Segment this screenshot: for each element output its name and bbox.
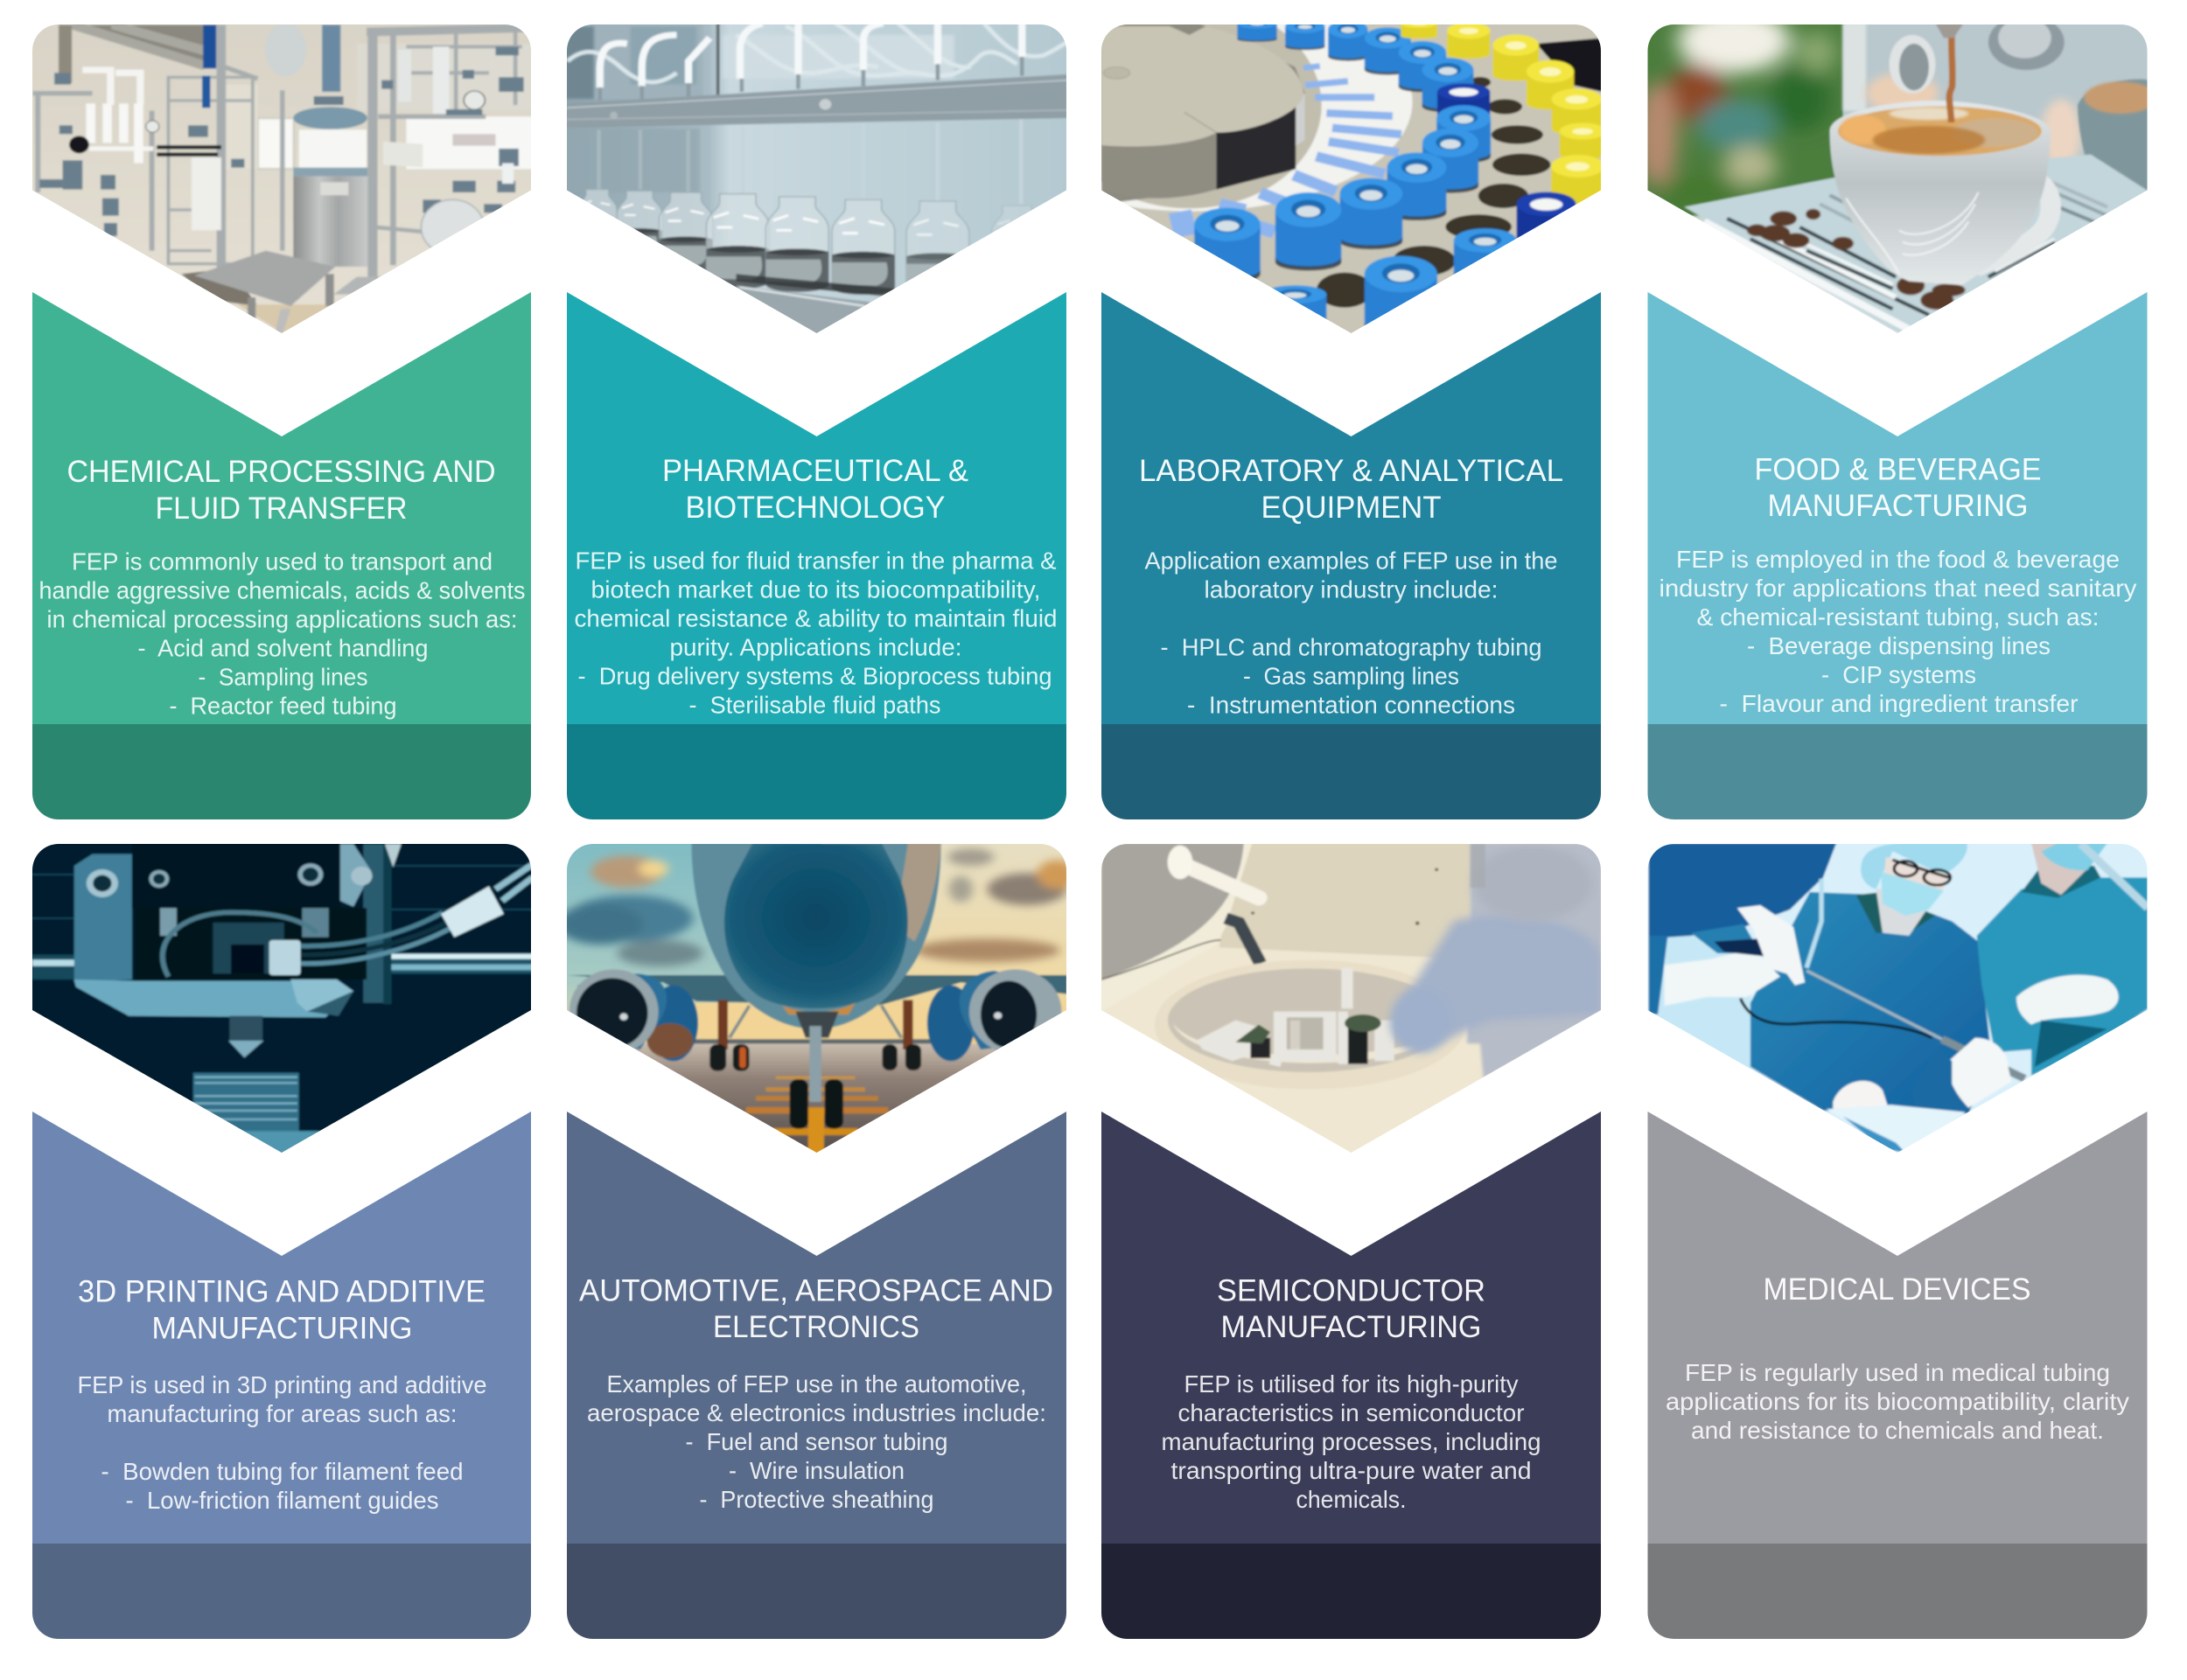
body text: - Sampling lines (198, 663, 367, 691)
heading (66, 455, 495, 526)
colour panel (1648, 1112, 2147, 1544)
body text: - Gas sampling lines (1243, 663, 1459, 689)
colour panel (32, 292, 531, 724)
body text: FEP is employed in the food & beverage (1676, 546, 2120, 573)
body text: characteristics in semiconductor (1177, 1399, 1524, 1426)
heading: MEDICAL DEVICES (1764, 1272, 2031, 1307)
body text: FEP is used for fluid transfer in the pharma & (576, 547, 1057, 574)
body text (1162, 1370, 1541, 1513)
body text: - Reactor feed tubing (170, 693, 397, 719)
body text: FEP is regularly used in medical tubing (1685, 1359, 2110, 1386)
colour panel (1648, 292, 2147, 724)
body text: FEP is utilised for its high-purity (1184, 1370, 1519, 1398)
heading (579, 1273, 1053, 1344)
body text: & chemical-resistant tubing, such as: (1697, 603, 2100, 631)
heading: SEMICONDUCTOR (1217, 1273, 1485, 1308)
footer band (1101, 724, 1601, 819)
heading: 3D PRINTING AND ADDITIVE (78, 1275, 486, 1308)
footer band (1101, 1544, 1601, 1639)
colour panel (567, 1112, 1066, 1544)
body text: manufacturing for areas such as: (107, 1400, 457, 1427)
colour panel (567, 292, 1066, 724)
photo: autosampler vial tray (1101, 24, 1601, 333)
body text: laboratory industry include: (1204, 575, 1498, 603)
photo: espresso pouring into cup (1648, 24, 2147, 333)
body text: manufacturing processes, including (1162, 1428, 1541, 1455)
body text: - Flavour and ingredient transfer (1720, 690, 2079, 717)
body text: Examples of FEP use in the automotive, (607, 1370, 1027, 1398)
body text: - CIP systems (1821, 661, 1976, 688)
body text (1144, 547, 1557, 719)
body text: industry for applications that need sanitary (1659, 575, 2137, 602)
body text: chemicals. (1296, 1486, 1407, 1513)
body text: - Low-friction filament guides (126, 1487, 438, 1514)
body text: in chemical processing applications such as: (47, 605, 518, 633)
panel: food and beverage manufacturing (1638, 9, 2161, 819)
heading: AUTOMOTIVE, AEROSPACE AND (579, 1273, 1053, 1308)
photo: vial filling line (564, 17, 1080, 341)
body text: - Fuel and sensor tubing (686, 1428, 948, 1455)
photo: chemical processing plant (26, 17, 542, 341)
photo: wafer processing chamber (1094, 840, 1610, 1163)
photo: 3D printer extruder (26, 840, 542, 1163)
heading (1755, 453, 2042, 523)
body text: purity. Applications include: (670, 633, 962, 661)
body text: and resistance to chemicals and heat. (1691, 1417, 2104, 1444)
footer band (567, 724, 1066, 819)
body text: Application examples of FEP use in the (1144, 547, 1557, 574)
panel: laboratory and analytical equipment (1101, 24, 1601, 819)
body text: biotech market due to its biocompatibility, (591, 575, 1041, 603)
panel: automotive, aerospace and electronics (557, 840, 1080, 1639)
body text (1659, 546, 2137, 717)
heading: CHEMICAL PROCESSING AND (66, 455, 495, 489)
colour panel (1101, 292, 1601, 724)
body text: aerospace & electronics industries include: (587, 1399, 1046, 1426)
body text (574, 547, 1057, 719)
body text (77, 1371, 486, 1514)
panel: 3D printing and additive manufacturing (26, 840, 542, 1639)
footer band (567, 1544, 1066, 1639)
footer band (32, 1544, 531, 1639)
body text: FEP is used in 3D printing and additive (77, 1371, 486, 1398)
colour panel (32, 1112, 531, 1544)
photo: aircraft nose at sunset (557, 840, 1080, 1161)
heading: BIOTECHNOLOGY (686, 491, 945, 525)
body text: - HPLC and chromatography tubing (1160, 633, 1541, 661)
body text: - Wire insulation (729, 1457, 905, 1484)
heading: MANUFACTURING (1767, 489, 2028, 523)
heading: LABORATORY & ANALYTICAL (1139, 454, 1563, 488)
heading: MANUFACTURING (152, 1312, 413, 1345)
body text: - Sterilisable fluid paths (689, 691, 941, 719)
heading: MANUFACTURING (1221, 1310, 1482, 1344)
heading (78, 1275, 486, 1345)
footer band (32, 724, 531, 819)
body text: - Instrumentation connections (1187, 691, 1515, 719)
footer band (1648, 1544, 2147, 1639)
body text (1666, 1359, 2129, 1444)
heading: ELECTRONICS (713, 1310, 919, 1344)
heading: FOOD & BEVERAGE (1755, 453, 2042, 486)
panel: chemical processing and fluid transfer (26, 17, 542, 819)
heading (1217, 1273, 1485, 1344)
body text: transporting ultra-pure water and (1170, 1457, 1531, 1484)
body text: - Drug delivery systems & Bioprocess tubing (577, 663, 1052, 689)
heading: FLUID TRANSFER (156, 491, 408, 526)
body text: chemical resistance & ability to maintain fluid (574, 605, 1057, 631)
panel: medical devices (1645, 840, 2161, 1639)
body text: - Beverage dispensing lines (1747, 632, 2051, 659)
heading: EQUIPMENT (1261, 491, 1442, 525)
colour panel (1101, 1112, 1601, 1544)
panel: semiconductor manufacturing (1094, 840, 1610, 1639)
panel: pharmaceutical and biotechnology (564, 17, 1080, 819)
body text: handle aggressive chemicals, acids & solvents (38, 577, 525, 603)
heading: PHARMACEUTICAL & (662, 454, 968, 488)
body text: - Protective sheathing (700, 1486, 934, 1513)
body text: applications for its biocompatibility, clarity (1666, 1388, 2129, 1415)
body text (587, 1370, 1046, 1513)
body text: - Acid and solvent handling (138, 635, 429, 661)
photo: surgeons with endoscope (1645, 840, 2161, 1163)
body text (38, 547, 525, 719)
heading (1139, 454, 1563, 525)
footer band (1648, 724, 2147, 819)
heading (662, 454, 968, 525)
body text: FEP is commonly used to transport and (72, 547, 493, 575)
body text: - Bowden tubing for filament feed (101, 1458, 464, 1485)
